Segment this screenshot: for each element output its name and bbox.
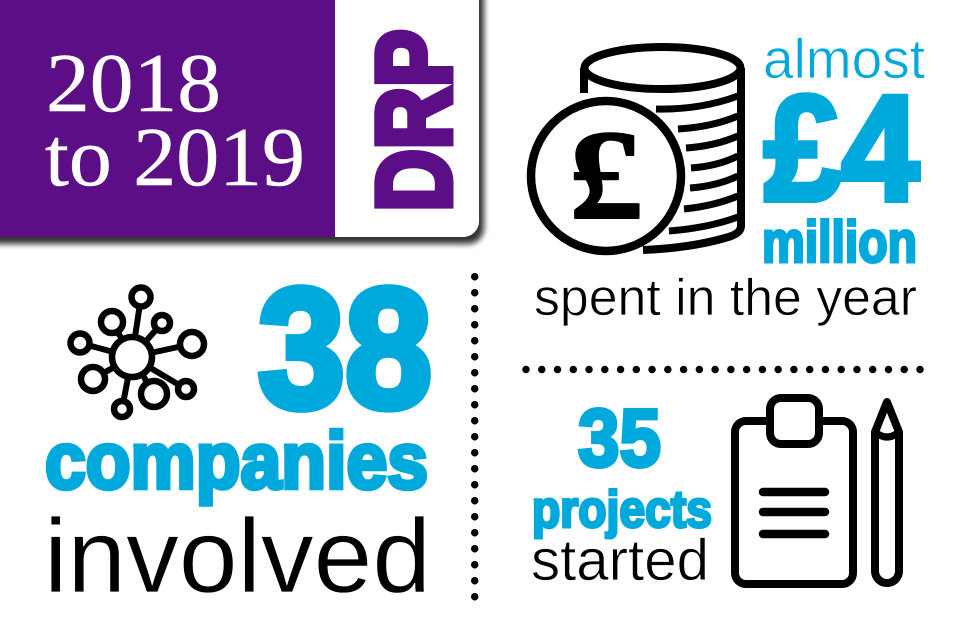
figure: 35: 35 xyxy=(578,393,661,484)
divider: vertical dots xyxy=(471,277,478,597)
text: spent in the year: spent in the year xyxy=(534,269,917,327)
banner background xyxy=(0,0,479,237)
text: started: started xyxy=(531,528,709,593)
panel: header banner xyxy=(0,0,479,237)
purple date block xyxy=(0,0,335,237)
front coin xyxy=(531,101,681,251)
heading: years xyxy=(45,37,305,204)
figure: 38: 38 xyxy=(258,254,432,444)
coin stack top and sides xyxy=(584,47,741,250)
coin stack stripes xyxy=(656,96,738,231)
text: almost: almost xyxy=(763,27,925,90)
figure: £4: £4 xyxy=(764,64,919,232)
heading: years: 2018 xyxy=(46,37,221,130)
icon: coin stack xyxy=(531,47,741,251)
text: companies: companies xyxy=(45,416,428,505)
network nodes xyxy=(70,288,204,417)
divider: horizontal dots xyxy=(526,366,921,373)
icon: clipboard xyxy=(735,398,853,584)
text: projects: projects xyxy=(532,481,712,539)
network connectors xyxy=(80,297,192,409)
pound sign: £ xyxy=(569,104,643,246)
icon: network xyxy=(70,288,204,417)
heading: years: to 2019 xyxy=(45,111,305,204)
icon: pencil xyxy=(875,402,899,583)
text: involved: involved xyxy=(44,498,431,615)
text: million: million xyxy=(762,210,917,275)
